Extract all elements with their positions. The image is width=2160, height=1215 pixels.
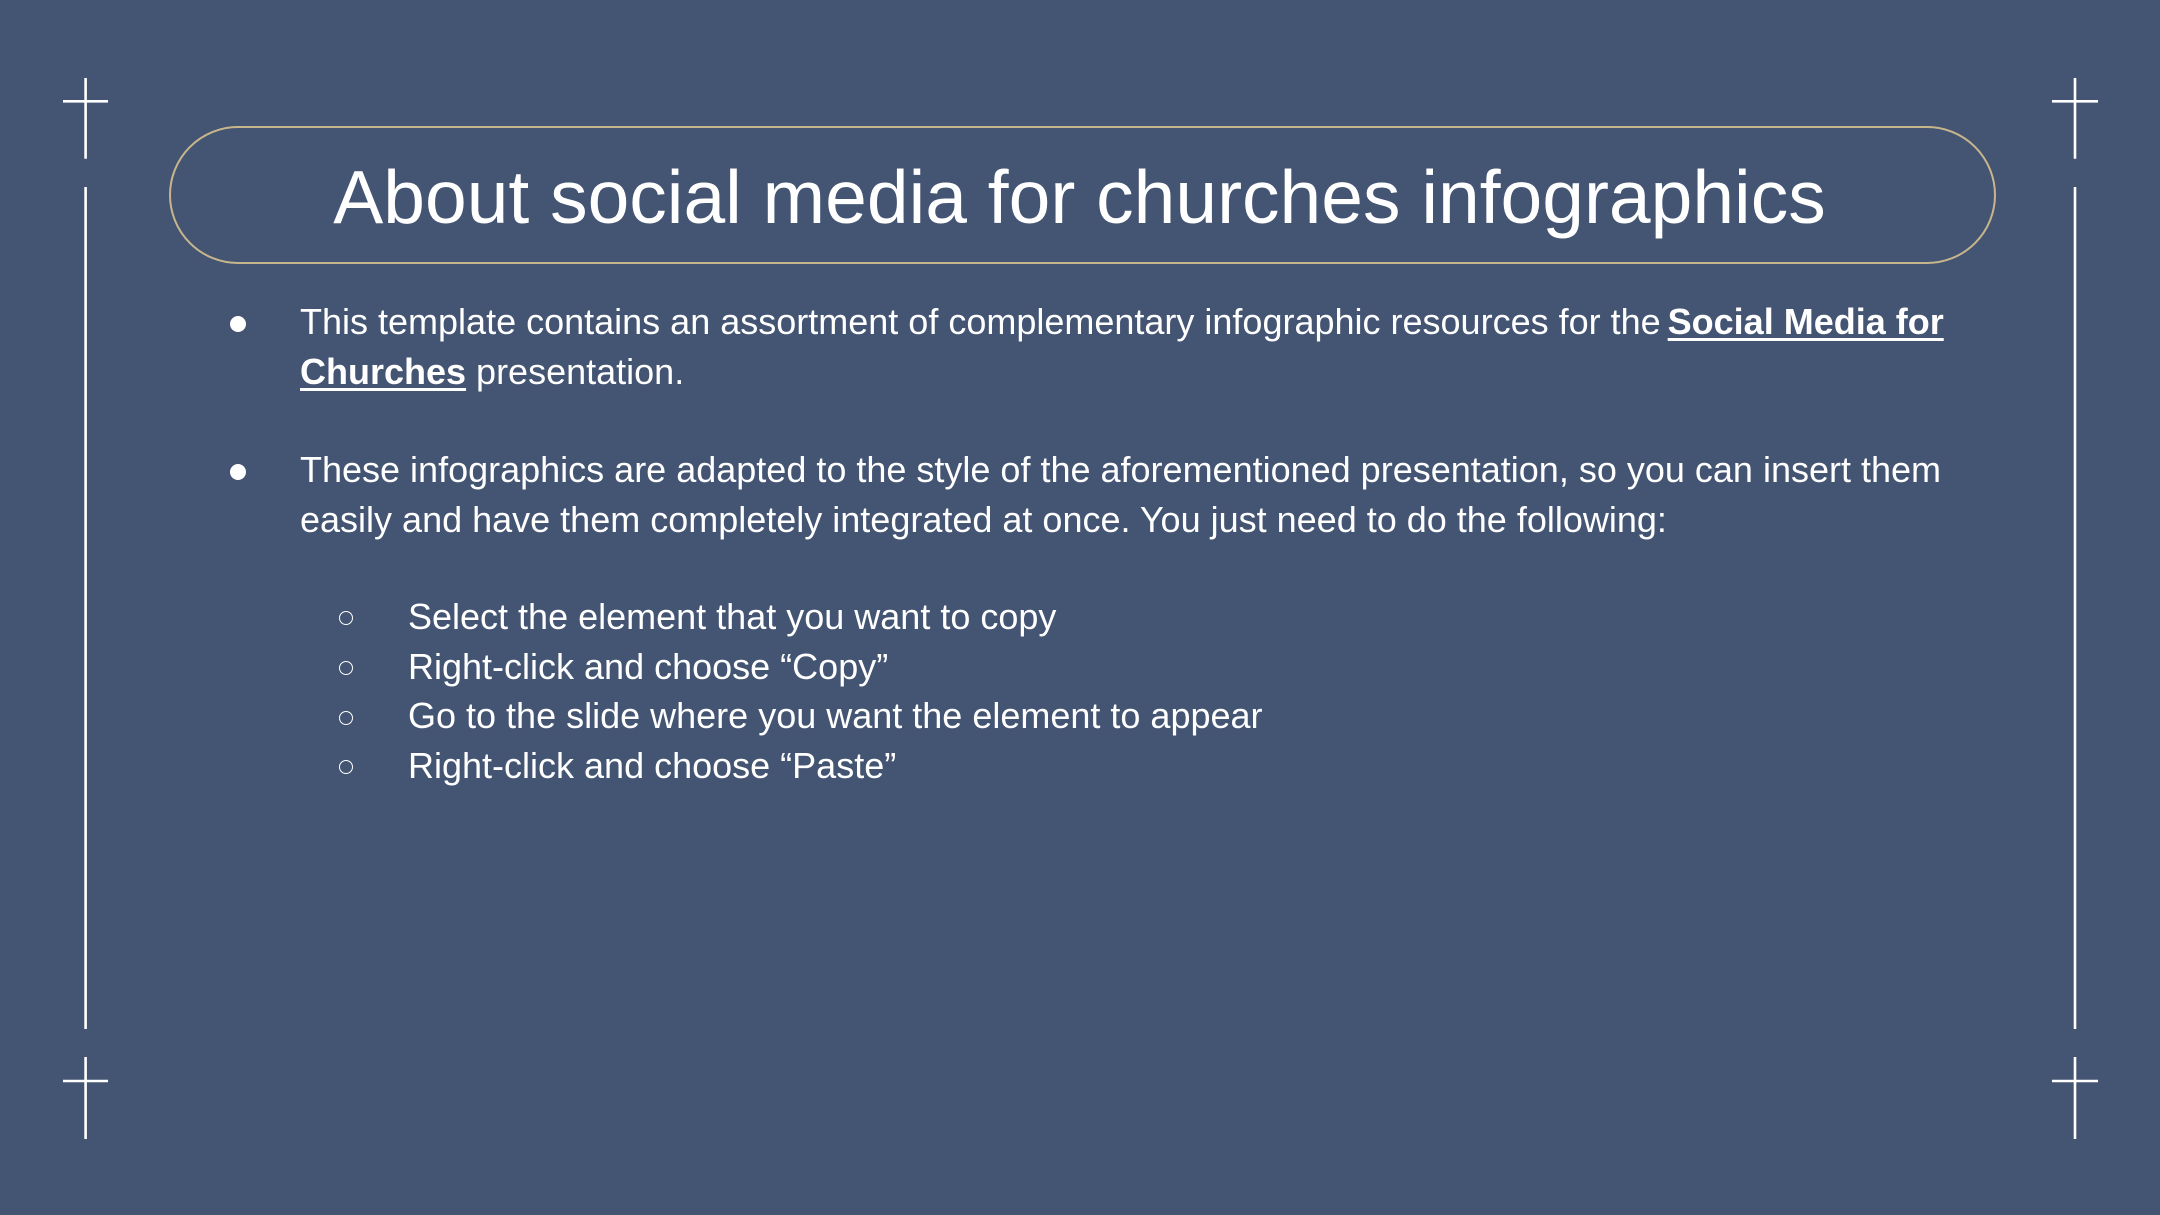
title: About social media for churches infographics (333, 155, 1826, 239)
title pill outline (169, 126, 1996, 264)
bullet 1 text: Churches presentation. (300, 351, 684, 392)
bullet 1 text: This template contains an assortment of complementary infographic resources for the Social Media for (300, 301, 1944, 342)
sub-bullet 3 text: Go to the slide where you want the element to appear (408, 695, 1263, 736)
bullet 2 text: easily and have them completely integrated at once. You just need to do the following: (300, 499, 1667, 540)
bullet 2 text (300, 449, 1941, 540)
bullet 1 text (300, 301, 1944, 392)
sub-bullet 2 marker (339, 661, 353, 675)
sub-bullet 3 marker (339, 711, 353, 725)
sub-bullet 4 text: Right-click and choose “Paste” (408, 745, 896, 786)
bullet 2 text: These infographics are adapted to the style of the aforementioned presentation, so you can insert them (300, 449, 1941, 490)
sub-bullet 4 marker (339, 760, 353, 774)
sub-bullet 1 text: Select the element that you want to copy (408, 596, 1056, 637)
frame: top-right cross (2052, 78, 2098, 159)
sub-bullet 1 marker (339, 611, 353, 625)
frame: left vertical line (84, 187, 87, 1029)
frame: bottom-left cross (63, 1057, 108, 1139)
bullet 1 marker (230, 316, 246, 332)
sub-bullet 2 text: Right-click and choose “Copy” (408, 646, 888, 687)
frame: top-left cross (63, 78, 108, 159)
frame: right vertical line (2074, 187, 2076, 1029)
frame: bottom-right cross (2052, 1057, 2098, 1139)
bullet 2 marker (230, 464, 246, 480)
